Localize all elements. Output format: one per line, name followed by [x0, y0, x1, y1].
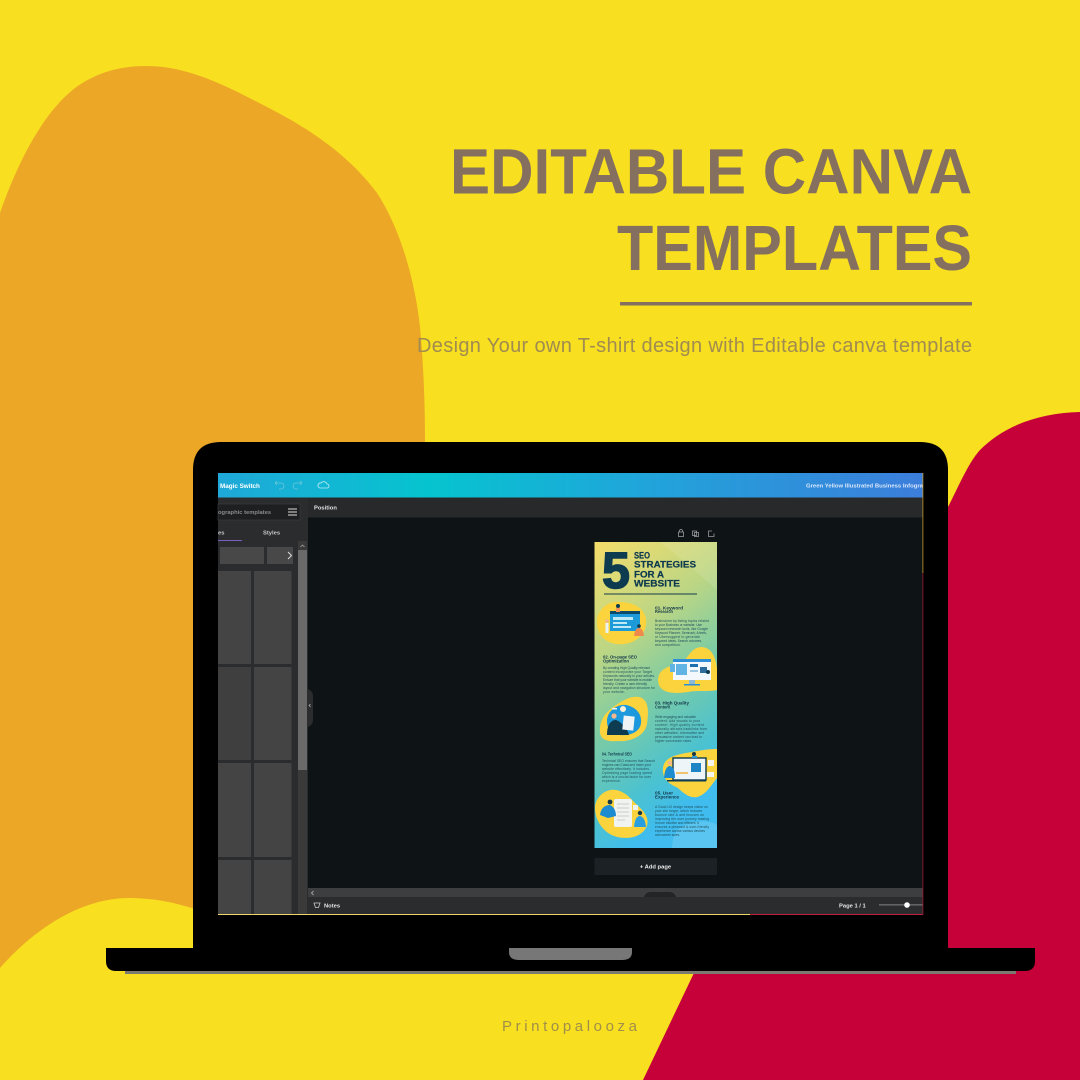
- section 04: experience.: [602, 779, 621, 783]
- mini heading: SEO: [634, 550, 650, 560]
- section 03: naturally attracts backlinks from: [655, 727, 707, 731]
- section 05: improving the user journey making: [655, 817, 709, 821]
- position bar: Position: [314, 506, 337, 512]
- illustration: technical seo: [663, 749, 717, 797]
- big number 5: 5: [602, 542, 630, 599]
- section 01: and competition.: [655, 643, 681, 647]
- section 04: engines can Crawl and Index your: [602, 763, 652, 767]
- notes bar: [308, 897, 923, 915]
- mini heading: STRATEGIES: [634, 560, 696, 570]
- section 05: bounce rate & and focuses on: [655, 813, 704, 817]
- illustration: on-page optimization: [658, 647, 717, 693]
- left side panel: [218, 498, 308, 915]
- section 04: Optimizing page loading speed: [602, 771, 652, 775]
- mini infographic page: [594, 542, 717, 848]
- template search box: [218, 504, 300, 520]
- subtitle: Design Your own T-shirt design with Editable canva template: [417, 335, 972, 357]
- section 05: ensures a pleasant & user-friendly: [655, 825, 709, 829]
- laptop base: [106, 948, 1035, 971]
- section 05: A Good UX design keeps visitor on: [655, 805, 708, 809]
- section 05: Experience: [655, 794, 680, 800]
- section 02: your website.: [603, 690, 625, 694]
- section 05: experience across various devices: [655, 829, 705, 833]
- top toolbar: Green Yellow Illustrated Business Infogra: [806, 484, 924, 490]
- section 02: content incorporate your Target: [603, 670, 652, 674]
- panel scrollbar: [298, 541, 307, 915]
- illustration: quality content: [600, 697, 648, 741]
- footer brand: Printopalooza: [502, 1018, 638, 1035]
- section 01: [597, 602, 709, 647]
- section 02: [603, 647, 717, 694]
- title rule: [620, 302, 972, 306]
- section 04: 04. Technical SEO: [602, 752, 632, 756]
- section 05: and screen sizes.: [655, 833, 680, 837]
- illustration: keyword research: [597, 602, 646, 644]
- section 03: [600, 697, 707, 743]
- screen: [218, 473, 924, 915]
- section 01: Brainstorm by listing topics related: [655, 619, 709, 623]
- section 02: friendly. Create a user-friendly: [603, 682, 647, 686]
- panel tabs: es: [218, 530, 224, 536]
- laptop notch: [509, 948, 632, 960]
- panel tabs: Styles: [263, 530, 280, 536]
- section 02: Ensure that your website is mobile: [603, 678, 652, 682]
- section 03: 03. High Quality: [655, 700, 690, 706]
- add page button: [594, 858, 717, 875]
- section 01: keyword research tools, like Google: [655, 627, 708, 631]
- screen edge highlights: [218, 473, 923, 915]
- section 01: to your Business or website. Use: [655, 623, 702, 627]
- page action icons: [678, 530, 714, 536]
- section 03: Write engaging and valuable: [655, 715, 696, 719]
- laptop: [106, 442, 1035, 974]
- section 02: Keywords naturally in your articles.: [603, 674, 655, 678]
- section 01: Keyword Planner, Semrush, Ahrefs,: [655, 631, 707, 635]
- section 03: content, Add visuals to your: [655, 719, 701, 723]
- notes bar: Page 1 / 1: [839, 904, 867, 910]
- laptop base shadow strip: [125, 968, 1016, 974]
- section 03: Content: [655, 704, 670, 710]
- title: [450, 136, 972, 284]
- section 04: website effectively. It includes: [602, 767, 649, 771]
- title: EDITABLE CANVA: [450, 136, 972, 208]
- section 02: 02. On-page SEO: [603, 654, 638, 660]
- section 02: layout and navigation structure for: [603, 686, 656, 690]
- section 05: 05. User: [655, 790, 673, 796]
- section 03: higher conversion rates.: [655, 739, 692, 743]
- canvas bottom scrollbar: [308, 888, 923, 897]
- mini heading: WEBSITE: [634, 579, 680, 589]
- section 05: it more intuitive and efficient. It: [655, 821, 699, 825]
- mini heading: FOR A: [634, 569, 665, 579]
- panel collapse handle: [308, 689, 313, 727]
- notes bar: Notes: [324, 904, 340, 910]
- yellow bottom blob: [0, 898, 300, 1080]
- section 01: or Ubersuggest to generate: [655, 635, 700, 639]
- section 01: 01. Keyword: [655, 606, 683, 610]
- crimson blob: [643, 412, 1080, 1080]
- section 03: content. High quality content: [655, 723, 704, 727]
- section 03: other websites. Informative and: [655, 731, 704, 735]
- section 02: By creating High Quality relevant: [603, 666, 650, 670]
- section 05: your site longer, which reduces: [655, 809, 702, 813]
- laptop lid: [193, 442, 948, 950]
- template thumbnails: [218, 571, 292, 915]
- section 05: [595, 790, 709, 838]
- section 01: Research: [655, 609, 673, 614]
- mini heading: [634, 550, 696, 589]
- top toolbar: Magic Switch: [220, 483, 260, 490]
- section 04: Technical SEO ensures that Search: [602, 759, 655, 763]
- corner glow shapes: [660, 542, 717, 590]
- illustration: user experience: [595, 790, 648, 838]
- position bar: [308, 498, 923, 518]
- add page button: + Add page: [640, 864, 672, 870]
- section 01: keyword ideas. Search volumes,: [655, 639, 702, 643]
- section 04: which is a crucial factor for user: [602, 775, 652, 779]
- orange blob: [0, 66, 425, 970]
- filter chips: [220, 547, 293, 564]
- section 03: persuasive content can lead to: [655, 735, 702, 739]
- section 02: Optimization: [603, 658, 629, 664]
- template search box: ographic templates: [218, 510, 271, 516]
- top toolbar: [218, 473, 924, 498]
- title: TEMPLATES: [617, 212, 972, 284]
- panel tabs: [218, 530, 280, 541]
- section 04: [602, 749, 717, 797]
